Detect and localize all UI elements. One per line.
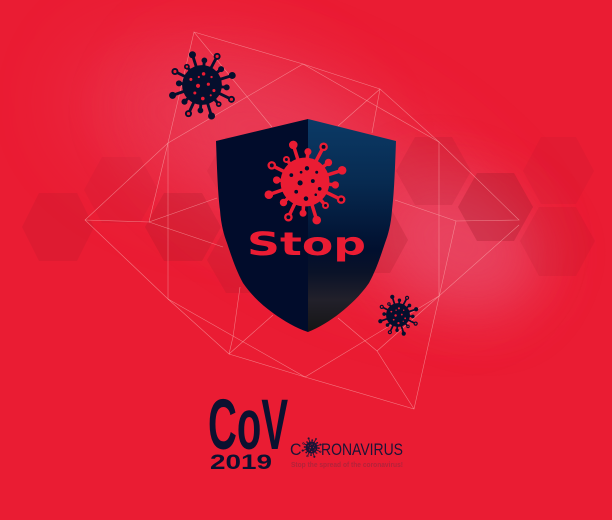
hexagon pattern xyxy=(22,137,595,293)
icon: virus as letter O xyxy=(302,437,322,458)
CoV heading: CoV xyxy=(208,386,288,465)
coronavirus wordmark xyxy=(290,437,403,459)
2019 subheading: 2019 xyxy=(210,451,272,474)
shield xyxy=(216,119,396,332)
wordmark letters RONAVIRUS: RONAVIRUS xyxy=(321,441,403,459)
icon: virus bottom right xyxy=(378,295,418,336)
tagline: Stop the spread of the coronavirus! xyxy=(291,460,403,469)
icon: virus on shield xyxy=(265,141,346,224)
wordmark letter C: C xyxy=(290,441,302,459)
logo: CoV 2019 xyxy=(208,386,288,474)
shield label: Stop: Stop xyxy=(247,225,366,263)
wireframe polygon lines xyxy=(85,32,519,409)
shield right half xyxy=(308,119,396,332)
shield left half xyxy=(216,119,308,332)
icon: virus top left xyxy=(169,51,236,120)
soft diagonal glow xyxy=(49,9,562,340)
